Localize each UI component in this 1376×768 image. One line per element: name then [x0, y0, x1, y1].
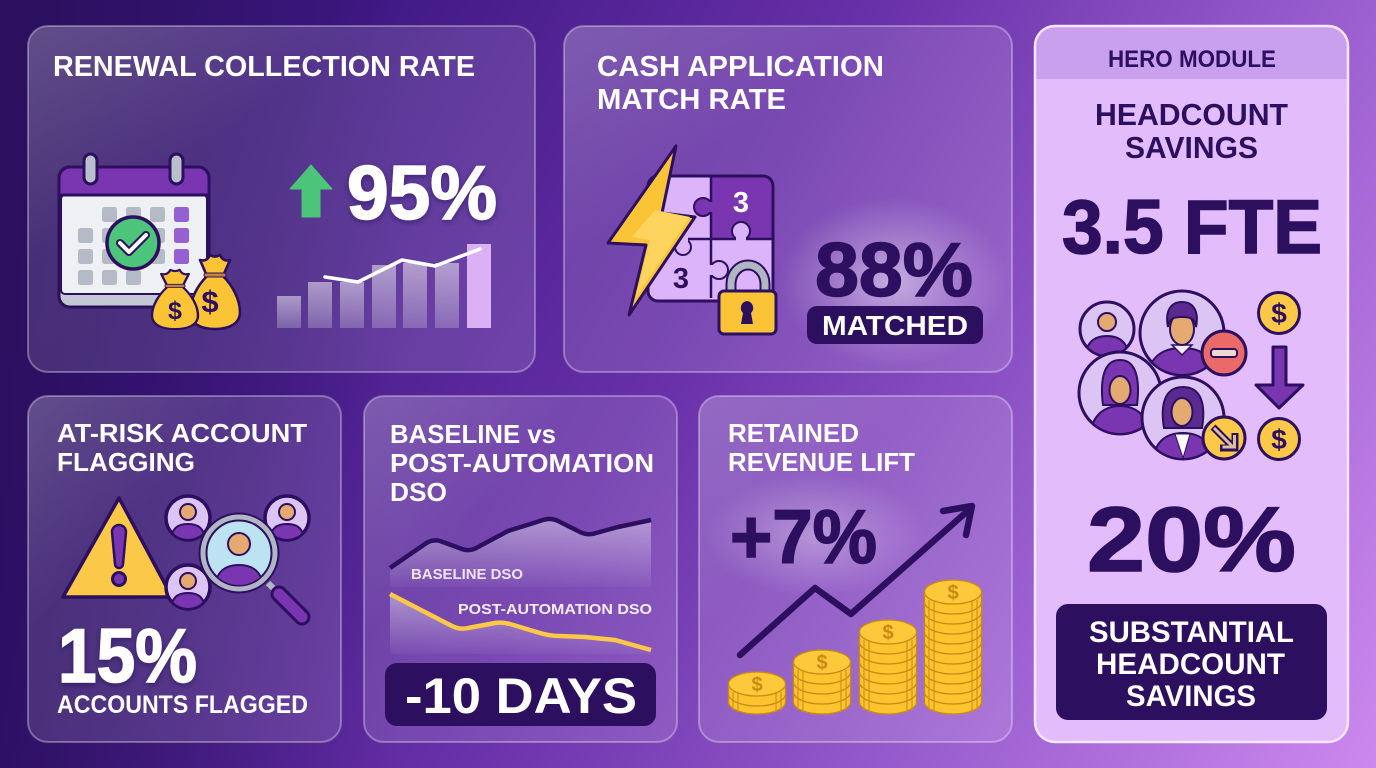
heading: RETAINED: [728, 418, 859, 448]
heading: REVENUE LIFT: [728, 447, 915, 477]
coin stack 4: $: [947, 582, 959, 604]
heading: CASH APPLICATION: [597, 51, 884, 83]
icon: coin bottom: $: [1271, 424, 1287, 455]
header band: [1035, 26, 1348, 79]
metric: 88%: 88%: [815, 228, 973, 313]
avatar: man: [1140, 291, 1224, 380]
icon: puzzle, bolt and lock: 3: [673, 263, 689, 295]
avatar: woman right: [1142, 377, 1224, 465]
arrow: rising trend: [740, 506, 972, 655]
avatar: woman left: [1079, 352, 1161, 440]
panel: retained revenue lift: [699, 396, 1012, 742]
pill: substantial headcount savings: SUBSTANTIAL: [1089, 616, 1294, 649]
coin stack 4: [924, 580, 982, 714]
metric: 20%: 20%: [1087, 489, 1296, 591]
header band: HERO MODULE: [1108, 46, 1276, 73]
badge: minus: [1202, 331, 1246, 375]
icon: puzzle, bolt and lock: 3: [733, 187, 749, 219]
panel: renewal collection rate: [28, 26, 535, 372]
icon: coin stacks: [728, 580, 982, 714]
panel: baseline vs post-automation DSO: [364, 396, 677, 742]
icon: coin top: $: [1271, 298, 1287, 329]
icon: coin top: [1258, 292, 1300, 334]
coin stack 3: $: [882, 622, 894, 644]
metric: 3.5 FTE: 3.5 FTE: [1062, 185, 1322, 270]
icon: calendar with money bags: [59, 154, 240, 329]
arrow: down: [1256, 347, 1303, 408]
heading: BASELINE vs: [390, 419, 556, 449]
icon: green up arrow: [290, 165, 332, 217]
coin stack 3: [860, 620, 916, 714]
heading: POST-AUTOMATION: [390, 448, 654, 478]
heading: FLAGGING: [57, 447, 195, 477]
pill: matched: MATCHED: [822, 310, 968, 341]
heading: AT-RISK ACCOUNT: [57, 418, 307, 448]
heading: HEADCOUNT: [1095, 97, 1288, 132]
badge: down-right arrow: [1203, 417, 1245, 459]
heading: DSO: [390, 477, 447, 507]
chart: post-automation DSO: [390, 594, 652, 654]
icon: warning triangle: [63, 498, 172, 597]
metric: +7%: +7%: [730, 495, 877, 580]
heading: MATCH RATE: [597, 84, 786, 116]
glow behind metric: [778, 197, 1008, 367]
icon: calendar with money bags: $: [168, 297, 182, 325]
coin stack 2: [794, 650, 850, 714]
bar chart with trend line: [277, 244, 491, 328]
coin stack 1: [728, 672, 786, 714]
pill: matched: [807, 306, 983, 344]
icon: calendar with money bags: $: [201, 284, 219, 319]
pill: substantial headcount savings: SAVINGS: [1126, 680, 1256, 713]
coin stack 1: $: [751, 674, 763, 696]
avatar: small person: [1080, 302, 1134, 360]
coin stack 2: $: [816, 652, 828, 674]
icon: team reduction: [1079, 291, 1303, 465]
panel: hero module headcount savings: [1035, 26, 1348, 742]
label: accounts flagged: ACCOUNTS FLAGGED: [57, 691, 308, 719]
pill: substantial headcount savings: HEADCOUNT: [1096, 648, 1285, 681]
chart: baseline DSO: [390, 519, 651, 587]
panel: cash application match rate: [564, 26, 1012, 372]
icon: coin bottom: [1258, 418, 1300, 460]
metric: 15%: 15%: [58, 614, 197, 699]
metric: 95%: 95%: [347, 151, 497, 236]
glow behind metric: [705, 473, 925, 597]
pill: substantial headcount savings: [1056, 604, 1327, 720]
heading: RENEWAL COLLECTION RATE: [53, 51, 475, 83]
icon: magnifier over accounts: [166, 496, 309, 617]
pill: minus 10 days: -10 DAYS: [405, 668, 637, 724]
panel: at-risk account flagging: [28, 396, 341, 742]
heading: SAVINGS: [1125, 130, 1258, 165]
icon: puzzle, bolt and lock: [608, 146, 776, 334]
chart: baseline DSO: BASELINE DSO: [411, 566, 523, 583]
chart: post-automation DSO: POST-AUTOMATION DSO: [458, 601, 652, 618]
